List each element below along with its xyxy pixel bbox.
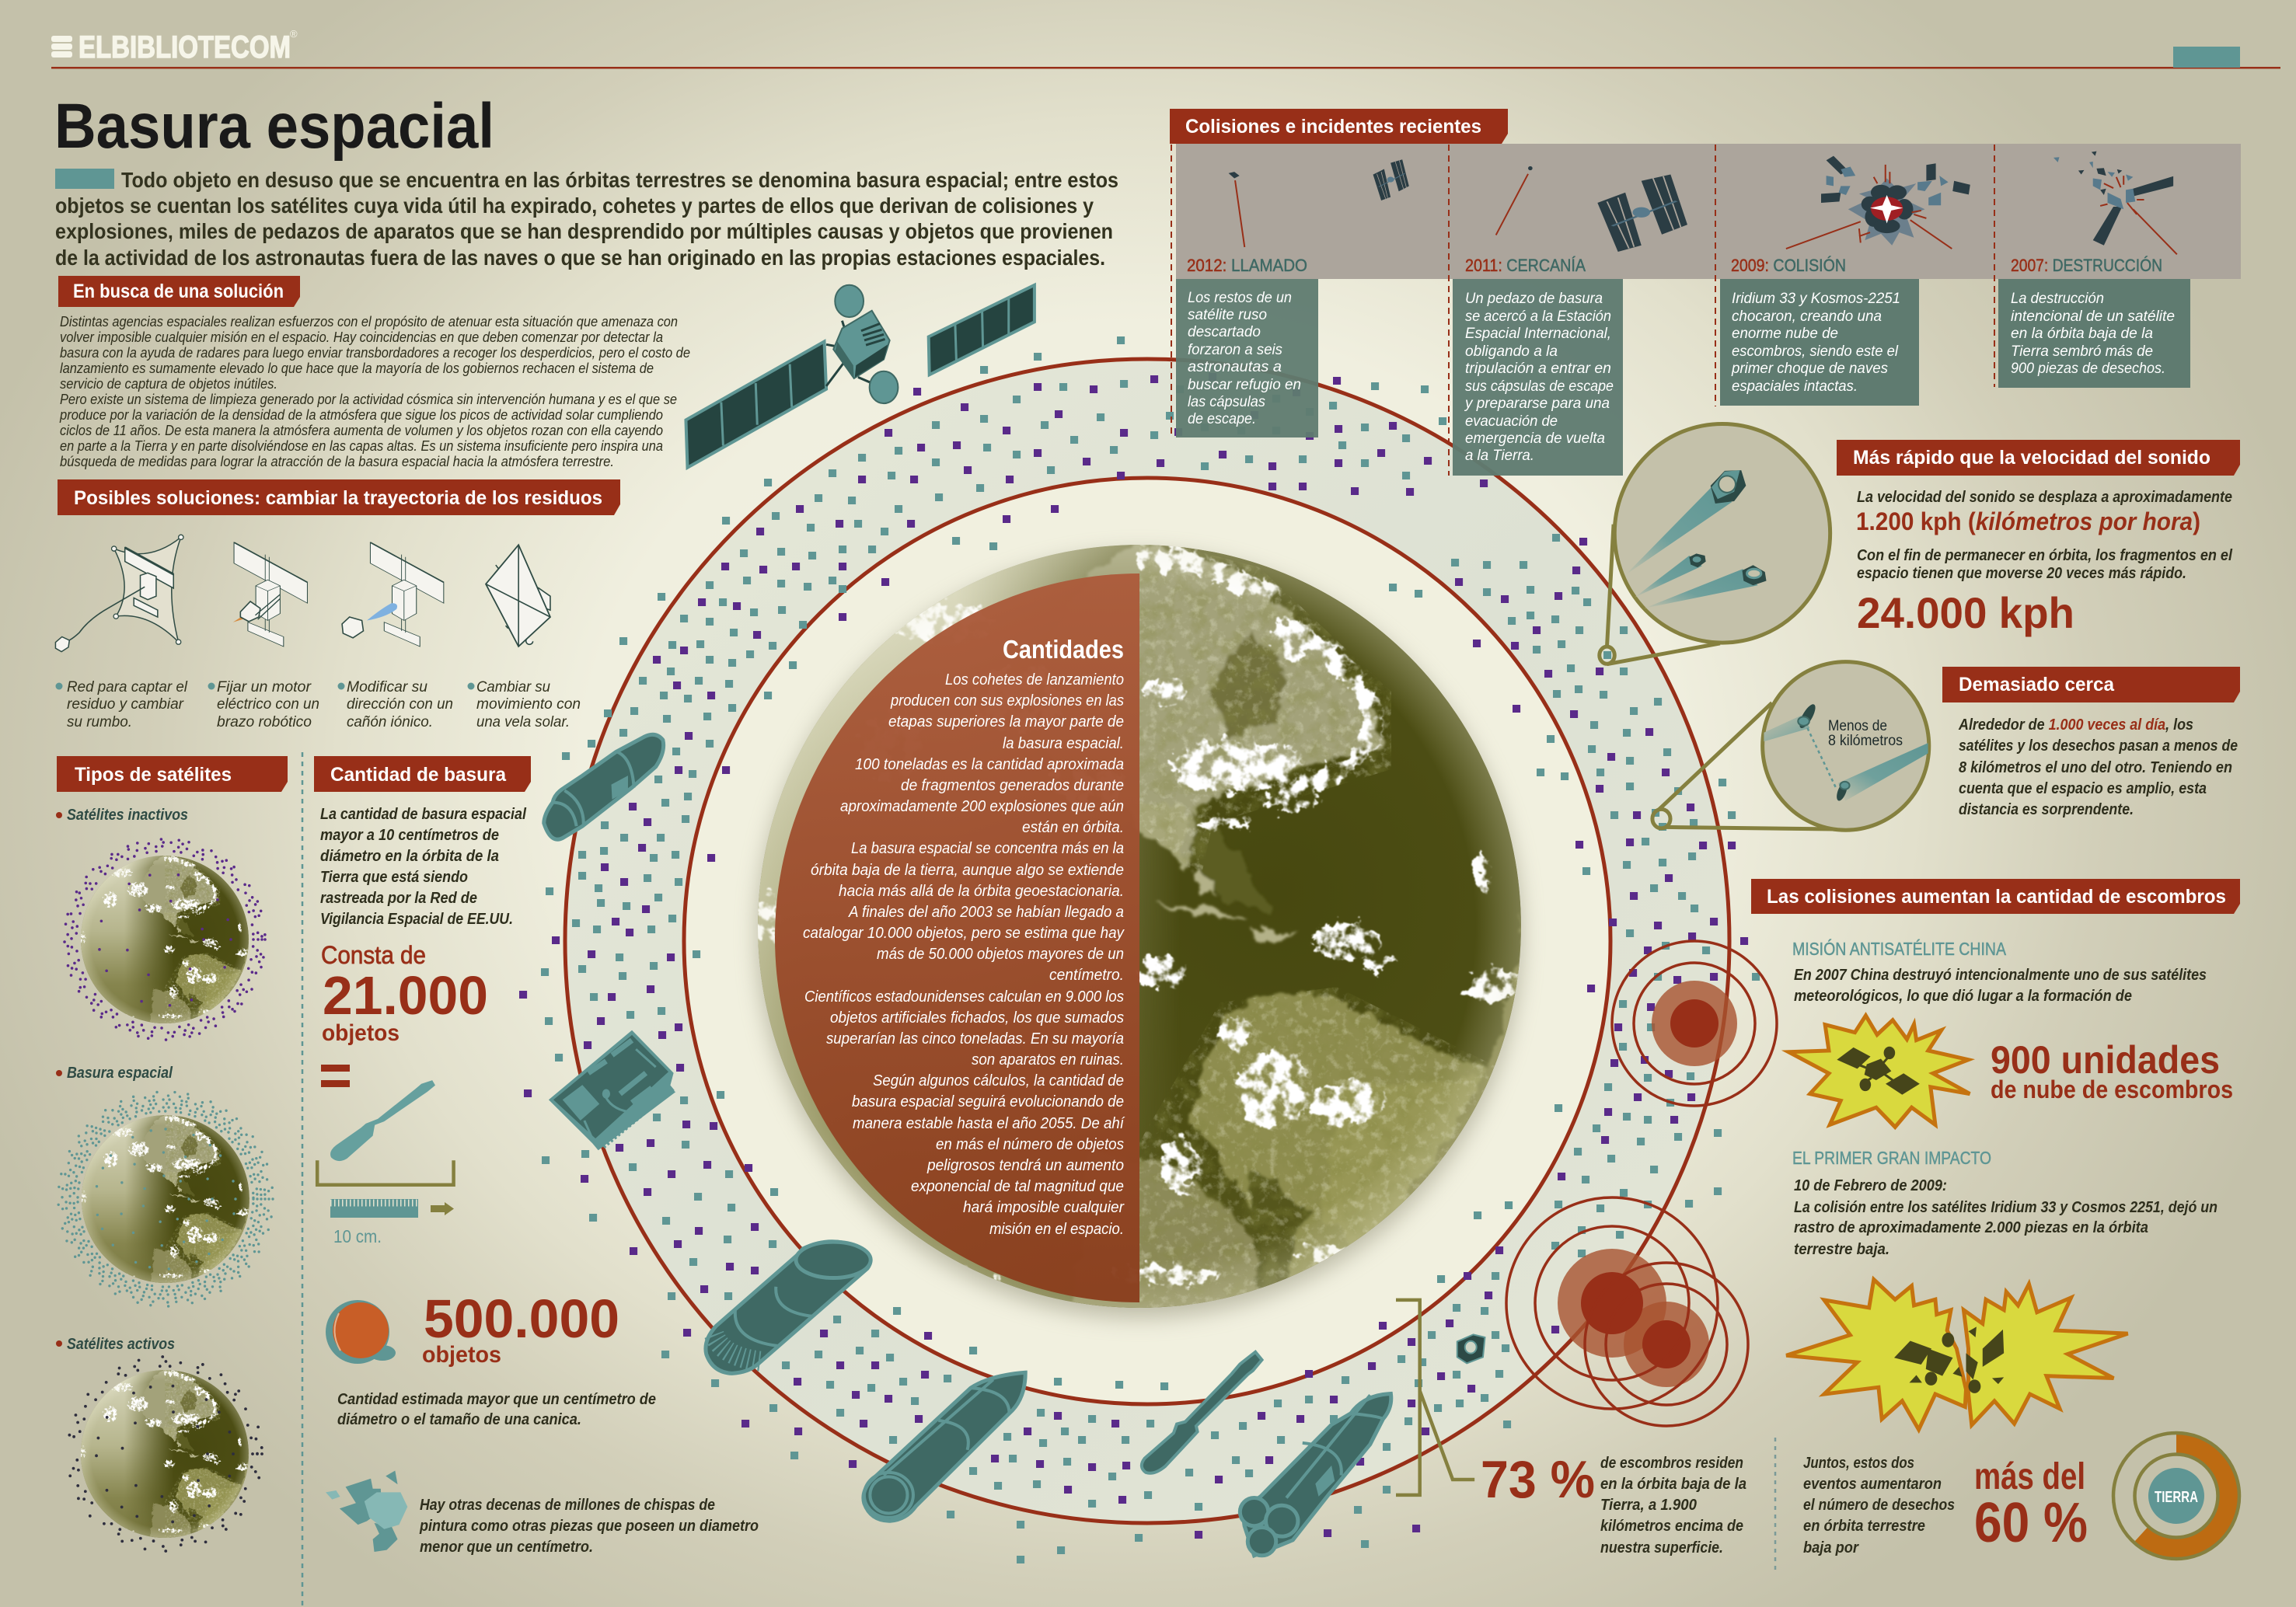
donut chart: Tierra: TIERRA [2155, 1489, 2198, 1506]
text: Demasiado cerca: satélites y los desechos pasan a menos de [1959, 737, 2238, 755]
text: China mission: meteorológicos, lo que dió lugar a la formación de [1794, 988, 2132, 1005]
text: En busca de una solución [59, 313, 690, 469]
heading: Colisiones e incidentes recientes: Colisiones e incidentes recientes [1185, 116, 1481, 138]
icon: open cylinder debris [706, 1242, 871, 1373]
panel: Cantidades: exponencial de tal magnitud que [911, 1178, 1124, 1195]
icon: screwdriver with 10 cm ruler: 10 cm. [333, 1226, 382, 1246]
solution labels: movimiento con [476, 695, 581, 713]
intro paragraph: explosiones, miles de pedazos de aparatos que se han desprendido por múltiples causas y objetos que provienen [55, 219, 1113, 243]
text: incident 2009: Iridium 33 y Kosmos-2251 [1732, 290, 1900, 307]
text: En busca de una solución: Distintas agencias espaciales realizan esfuerzos con el propósito de atenuar esta situación que amenaza con [60, 313, 678, 329]
text: En busca de una solución: ciclos de 11 años. De esta manera la atmósfera aumenta de volumen y los objetos rozan con ella cayendo [60, 422, 663, 438]
panel: Cantidades: 100 toneladas es la cantidad aproximada [855, 756, 1124, 773]
text: paint chips [419, 1497, 759, 1556]
icon: small hex nut [1457, 1334, 1485, 1363]
heading: Cantidad de basura [314, 756, 531, 792]
text: first impact: 10 de Febrero de 2009: [1794, 1177, 1947, 1194]
icons: incident 2012 and 2011 [1229, 159, 1687, 252]
text: China mission [1792, 939, 2207, 1005]
stat: 73 percent: 73 % [1481, 1450, 1595, 1509]
text: En busca de una solución: en parte a la Tierra y en parte disolviéndose en las capas altas. Es un sistema insuficiente pero inspira una [60, 437, 663, 454]
panel: Cantidades: la basura espacial. [1003, 735, 1124, 752]
text: Demasiado cerca: Alrededor de 1.000 veces al día, los [1958, 716, 2193, 734]
text: China mission: MISIÓN ANTISATÉLITE CHINA [1792, 939, 2007, 959]
heading: Posibles soluciones: Posibles soluciones: cambiar la trayectoria de los residuos [74, 487, 602, 509]
panel: Cantidades: basura espacial seguirá evolucionando de [852, 1093, 1124, 1110]
panel: Cantidades: de fragmentos generados durante [901, 777, 1124, 794]
text: incident 2012 [1188, 289, 1301, 427]
debris field squares [523, 340, 1756, 1560]
stat: 73 percent: Tierra, a 1.900 [1600, 1497, 1697, 1514]
text: incident 2007: La destrucción [2011, 290, 2104, 307]
earth with shadow [746, 528, 1531, 1329]
text: incident 2011: emergencia de vuelta [1465, 430, 1605, 447]
icon: screwdriver debris [1142, 1352, 1262, 1473]
icon: electric motor solution [233, 542, 307, 647]
stat: 500.000 objetos: objetos [422, 1342, 501, 1368]
solution labels: una vela solar. [476, 713, 570, 730]
panel: Cantidades: producen con sus explosiones en las [890, 692, 1124, 709]
solution labels: brazo robótico [217, 713, 312, 730]
icon: double explosion collision [1786, 1280, 2128, 1430]
heading: Las colisiones: Las colisiones aumentan la cantidad de escombros [1767, 886, 2226, 908]
icon: collision target rings [1506, 941, 1777, 1426]
text: speed of sound: espacio tienen que moverse 20 veces más rápido. [1857, 565, 2186, 582]
panel: Cantidades: Los cohetes de lanzamiento [945, 671, 1124, 688]
satellite type: inactive [56, 807, 265, 1040]
solution labels: residuo y cambiar [67, 695, 184, 713]
heading: Colisiones e incidentes recientes [1170, 109, 1508, 144]
text: 900 unidades [1991, 1038, 2233, 1103]
text: speed of sound: 24.000 kph [1857, 588, 2074, 637]
text: incident 2009 [1731, 290, 1900, 395]
text: paint chips: menor que un centímetro. [420, 1539, 593, 1556]
text: paint chips: Hay otras decenas de millones de chispas de [420, 1497, 715, 1514]
text: incident years [1187, 256, 2162, 275]
stat: 73 percent [1481, 1450, 1746, 1556]
panel: Cantidades: aproximadamente 200 explosiones que aún [840, 798, 1124, 815]
panel: Cantidades: objetos artificiales fichados, los que sumados [830, 1009, 1124, 1027]
text: China mission: En 2007 China destruyó intencionalmente uno de sus satélites [1794, 967, 2207, 984]
solution labels: Modificar su [347, 678, 427, 695]
text: En busca de una solución: servicio de captura de objetos inútiles. [60, 375, 277, 392]
panel: Cantidades: manera estable hasta el año 2055. De ahí [853, 1115, 1125, 1132]
intro paragraph: Todo objeto en desuso que se encuentra en las órbitas terrestres se denomina basura espacial; entre estos [121, 168, 1118, 192]
icon: incident 2007 destruction [2053, 152, 2177, 254]
text: incident 2007: 900 piezas de desechos. [2011, 360, 2165, 377]
text: incident 2007: en la órbita baja de la [2011, 325, 2153, 342]
stat: 73 percent: de escombros residen [1600, 1455, 1743, 1472]
text: incident 2012: de escape. [1188, 410, 1256, 427]
text: first impact [1792, 1148, 2217, 1258]
stat: más del 60 percent: más del [1974, 1456, 2085, 1497]
stat: 21.000 objetos: objetos [322, 1020, 400, 1046]
text: speed of sound: Con el fin de permanecer en órbita, los fragmentos en el [1857, 547, 2232, 564]
text: En busca de una solución: búsqueda de medidas para lograr la atracción de la basura espacial hacia la atmósfera terrestre. [60, 453, 614, 469]
stat: más del 60 percent: en órbita terrestre [1803, 1518, 1925, 1535]
icon: explosion with satellite [1788, 1016, 1970, 1127]
stat: 500.000 objetos: 500.000 [424, 1288, 619, 1349]
solution labels: cañón iónico. [347, 713, 433, 730]
stat: más del 60 percent: baja por [1803, 1539, 1859, 1556]
text: incident 2011: obligando a la [1465, 343, 1558, 360]
text: Demasiado cerca: 8 kilómetros el uno del otro. Teniendo en [1959, 759, 2232, 776]
text: first impact: rastro de aproximadamente 2.000 piezas en la órbita [1794, 1219, 2148, 1236]
panel: Cantidades: La basura espacial se concentra más en la [851, 840, 1124, 857]
text: incident 2011: Un pedazo de basura [1465, 290, 1603, 307]
icon: rocket body [864, 1372, 1025, 1521]
text: speed of sound: 1.200 kph (kilómetros por hora) [1856, 507, 2200, 535]
panel: Cantidades: centímetro. [1049, 967, 1124, 984]
intro paragraph: de la actividad de los astronautas fuera de las naves o que se han originado en las propias estaciones espaciales. [55, 246, 1105, 270]
text: incident 2012: buscar refugio en [1188, 376, 1301, 393]
panel: Cantidades: hacia más allá de la órbita geoestacionaria. [839, 883, 1124, 900]
text: incident 2007 [2011, 290, 2175, 377]
stat: 21.000 objetos: 21.000 [323, 965, 488, 1026]
stat: más del 60 percent: 60 % [1974, 1492, 2088, 1554]
panel: Cantidades: en más el número de objetos [936, 1136, 1124, 1153]
satellite type: space debris: Basura espacial [67, 1065, 173, 1082]
text: incident years: 2012: LLAMADO [1187, 256, 1307, 275]
text: 900 unidades: 900 unidades [1991, 1038, 2220, 1082]
panel: Cantidades: hará imposible cualquier [963, 1199, 1125, 1216]
text: En busca de una solución: volver imposible cualquier misión en el espacio. Hay coincidencias en que deben comenzar por detectar la [60, 329, 663, 345]
text: incident 2011: y prepararse para una [1464, 395, 1610, 412]
heading: Las colisiones [1751, 879, 2240, 914]
stat: más del 60 percent: Juntos, estos dos [1803, 1455, 1914, 1472]
text: cantidad de basura: Vigilancia Espacial de EE.UU. [320, 911, 513, 928]
text: incident 2012: descartado [1188, 323, 1261, 340]
panel: Cantidades: superarían las cinco toneladas. En su mayoría [826, 1030, 1124, 1048]
heading: Tipos de satélites: Tipos de satélites [75, 764, 232, 786]
intro paragraph [55, 168, 1118, 270]
text: En busca de una solución: lanzamiento es sumamente elevado lo que hace que la mayoría de los gobiernos rechacen el sistema de [60, 360, 654, 376]
corner tab [2173, 47, 2240, 68]
logo: ELBIBLIOTECOM [79, 30, 291, 64]
label: less than 8 km: 8 kilómetros [1828, 733, 1903, 749]
callout: magnifier with close pass [1652, 662, 1929, 830]
icon: paint chips debris [326, 1471, 407, 1552]
heading: En busca de una solución: En busca de una solución [73, 281, 284, 302]
stat: más del 60 percent: eventos aumentaron [1803, 1476, 1942, 1493]
heading: Cantidad de basura: Cantidad de basura [330, 764, 507, 786]
stat: 73 percent: nuestra superficie. [1600, 1539, 1723, 1556]
icon: ion cannon solution [342, 542, 444, 647]
text: incident 2009: escombros, siendo este el [1732, 343, 1899, 360]
satellite type: space debris [56, 1065, 273, 1306]
label: less than 8 km: Menos de [1828, 718, 1887, 734]
stat: más del 60 percent [1803, 1455, 2088, 1556]
intro paragraph: objetos se cuentan los satélites cuya vida útil ha expirado, cohetes y partes de ellos que derivan de colisiones y [55, 193, 1094, 218]
text: En busca de una solución: Pero existe un sistema de limpieza generado por la actividad cósmica sin intervención humana y es el que se [60, 391, 677, 407]
text: incident 2009: primer choque de naves [1731, 360, 1888, 377]
text: 900 unidades: de nube de escombros [1991, 1075, 2233, 1103]
text: incident 2009: enorme nube de [1732, 325, 1838, 342]
panel: incidents band [1171, 144, 2241, 476]
label: less than 8 km [1828, 718, 1903, 749]
panel: Cantidades: son aparatos en ruinas. [972, 1051, 1124, 1068]
text: incident 2012: Los restos de un [1188, 289, 1292, 306]
text: incident years: 2007: DESTRUCCIÓN [2011, 256, 2162, 275]
panel: Cantidades: más de 50.000 objetos mayores de un [877, 946, 1124, 963]
logo: ® [290, 28, 298, 40]
text: incident 2012: satélite ruso [1188, 306, 1267, 323]
text: incident 2012: las cápsulas [1188, 393, 1265, 410]
icon: screwdriver with 10 cm ruler [317, 1080, 454, 1246]
text: speed of sound: La velocidad del sonido se desplaza a aproximadamente [1857, 489, 2232, 506]
bracket: low orbit share [1396, 1300, 1474, 1495]
icon: multi-nozzle rocket [1240, 1393, 1391, 1556]
text: Demasiado cerca [1958, 716, 2238, 818]
heading: Más rápido [1837, 440, 2240, 476]
text: Demasiado cerca: cuenta que el espacio es amplio, esta [1959, 780, 2207, 797]
stat: 21.000 objetos: Consta de [321, 941, 426, 969]
text: incident years: 2009: COLISIÓN [1731, 256, 1846, 275]
callout: magnifier with fast fragments [1600, 424, 1830, 664]
text: incident 2009: espaciales intactas. [1732, 378, 1858, 395]
satellite type: active: Satélites activos [67, 1336, 175, 1353]
solution labels: Fijar un motor [217, 678, 312, 695]
text: incident 2012: astronautas a [1188, 358, 1282, 375]
text: paint chips: pintura como otras piezas que poseen un diametro [419, 1518, 759, 1535]
text: cantidad de basura: mayor a 10 centímetros de [320, 827, 499, 844]
text: incident 2011 [1464, 290, 1614, 464]
text: cantidad de basura: La cantidad de basura espacial [320, 806, 526, 823]
panel: Cantidades: misión en el espacio. [989, 1221, 1124, 1238]
panel: Cantidades: Según algunos cálculos, la cantidad de [873, 1072, 1124, 1089]
text: incident 2011: Espacial Internacional, [1465, 325, 1611, 342]
solution labels: Red para captar el [67, 678, 188, 695]
icon: booster debris [544, 734, 664, 839]
text: first impact: terrestre baja. [1794, 1241, 1889, 1258]
text: incident 2012: forzaron a seis [1188, 341, 1282, 358]
icon: solar sail solution [486, 545, 550, 647]
heading: Demasiado cerca: Demasiado cerca [1959, 674, 2115, 695]
text: first impact: EL PRIMER GRAN IMPACTO [1792, 1148, 1991, 1168]
text: cantidad de basura: Tierra que está siendo [320, 869, 468, 886]
icon: incident 2009 explosion [1786, 156, 1970, 249]
panel: Cantidades: Científicos estadounidenses calculan en 9.000 los [804, 988, 1124, 1006]
text: incident 2011: sus cápsulas de escape [1465, 378, 1614, 395]
text: cantidad de basura: rastreada por la Red de [320, 890, 477, 907]
text: speed of sound [1856, 489, 2232, 637]
satellite type: inactive: Satélites inactivos [67, 807, 188, 824]
text: incident 2011: a la Tierra. [1465, 447, 1534, 464]
solution labels: eléctrico con un [217, 695, 319, 713]
text: En busca de una solución: produce por la variación de la densidad de la atmósfera que sigue los picos de actividad solar cumpliendo [59, 406, 663, 423]
heading: Posibles soluciones [58, 479, 620, 515]
text: incident 2007: intencional de un satélite [2011, 308, 2175, 325]
text: incident 2011: evacuación de [1465, 413, 1558, 430]
panel: Cantidades: órbita baja de la tierra, aunque algo se extiende [811, 862, 1124, 879]
icon: satellite [686, 285, 1035, 468]
solution labels: Cambiar su [476, 678, 550, 695]
stat: 73 percent: en la órbita baja de la [1600, 1476, 1746, 1493]
heading: En busca de una solución [58, 276, 300, 307]
text: incident years: 2011: CERCANÍA [1465, 256, 1586, 275]
icon: circuit board [549, 1030, 675, 1150]
solution labels [56, 678, 581, 730]
panel: Cantidades: Cantidades [1003, 635, 1124, 664]
panel: Cantidades: están en órbita. [1022, 819, 1124, 836]
heading: Demasiado cerca [1942, 667, 2240, 702]
text: incident 2009: chocaron, creando una [1732, 308, 1882, 325]
text: Demasiado cerca: distancia es sorprendente. [1959, 801, 2134, 818]
text: first impact: La colisión entre los satélites Iridium 33 y Cosmos 2251, dejó un [1794, 1199, 2217, 1216]
text: cantidad de basura: diámetro en la órbita de la [320, 848, 499, 865]
heading: Tipos de satélites [57, 756, 288, 792]
text: incident 2011: se acercó a la Estación [1465, 308, 1611, 325]
solution labels: su rumbo. [67, 713, 132, 730]
stat: 21.000 objetos [321, 941, 488, 1087]
heading: Más rápido: Más rápido que la velocidad del sonido [1853, 447, 2211, 469]
stat: 500.000 objetos: Cantidad estimada mayor que un centímetro de [337, 1391, 656, 1408]
panel: Cantidades: etapas superiores la mayor parte de [888, 713, 1124, 730]
stat: más del 60 percent: el número de desechos [1803, 1497, 1955, 1514]
satellite type: active [56, 1336, 262, 1551]
stat: 73 percent: kilómetros encima de [1600, 1518, 1743, 1535]
stat: 500.000 objetos [326, 1288, 656, 1428]
donut chart: Tierra [2113, 1433, 2239, 1559]
panel: Cantidades: A finales del año 2003 se habían llegado a [848, 904, 1124, 921]
panel: Cantidades: catalogar 10.000 objetos, pero se estima que hay [803, 925, 1125, 942]
text: incident 2011: tripulación a entrar en [1465, 360, 1611, 377]
text: En busca de una solución: basura con la ayuda de radares para luego enviar transbordadores a recoger los desperdicios, pero el costo de [60, 344, 690, 361]
solution labels: dirección con un [347, 695, 453, 713]
panel: Cantidades [775, 573, 1139, 1302]
stat: 500.000 objetos: diámetro o el tamaño de una canica. [337, 1411, 581, 1428]
icon: capture net solution [55, 535, 183, 652]
text: incident 2007: Tierra sembró más de [2011, 343, 2153, 360]
orbit ring [565, 359, 1729, 1523]
text: cantidad de basura [320, 806, 526, 928]
title: Basura espacial [54, 91, 494, 162]
panel: Cantidades: peligrosos tendrá un aumento [926, 1157, 1124, 1174]
